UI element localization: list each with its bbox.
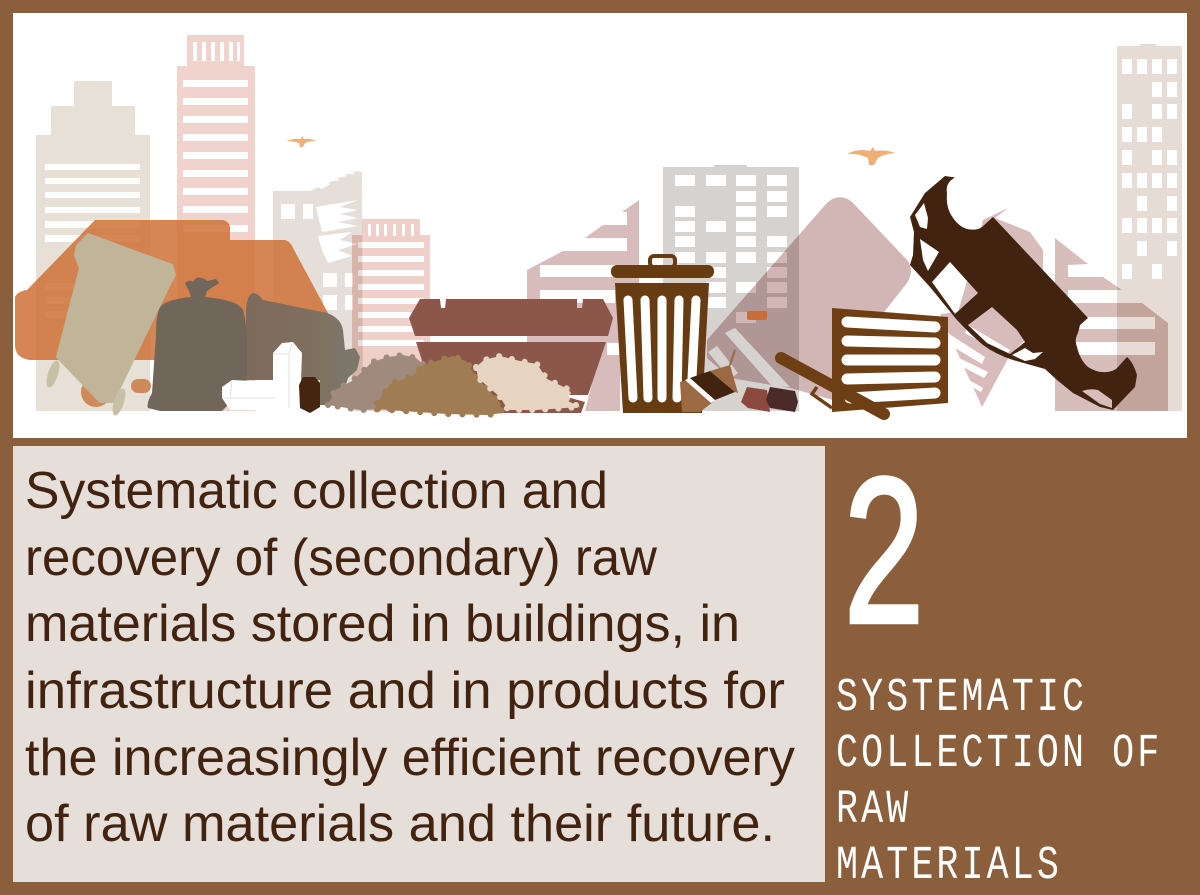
waste: paint brush xyxy=(680,350,738,412)
waste: beige wheelie bin xyxy=(44,234,175,417)
waste: milk carton xyxy=(222,342,302,410)
waste: small orange block xyxy=(747,311,767,320)
building: right windowed tower xyxy=(1117,44,1182,411)
icon: large bird xyxy=(847,147,895,165)
building: grey windowed tower xyxy=(663,165,799,411)
heading: systematic collection of raw materials: COLLECTION OF xyxy=(836,727,1162,780)
waste: wooden handle tool xyxy=(781,358,884,414)
description paragraph: Systematic collection and xyxy=(25,462,608,520)
description paragraph: recovery of (secondary) raw xyxy=(25,529,657,587)
description paragraph: materials stored in buildings, in xyxy=(25,595,740,653)
description paragraph: of raw materials and their future. xyxy=(25,795,775,853)
waste: slatted crate xyxy=(832,308,948,412)
waste: small dark bottle xyxy=(299,377,320,413)
panel: description text xyxy=(13,446,825,882)
building: beige stepped tower xyxy=(36,81,150,411)
waste: taupe rubble pile xyxy=(328,355,430,410)
waste: trash can xyxy=(611,256,714,413)
building: right mauve block xyxy=(1055,238,1168,411)
building: small pink tower xyxy=(352,219,430,411)
building: pink tower xyxy=(177,35,255,411)
description paragraph: infrastructure and in products for xyxy=(25,662,785,720)
building: mauve stepped block xyxy=(527,200,639,411)
waste: orange truck xyxy=(15,220,330,407)
waste: paint can pieces xyxy=(741,387,798,412)
heading: systematic collection of raw materials: MATERIALS xyxy=(836,839,1062,892)
icon: small bird xyxy=(286,136,316,147)
panel: illustration of city and waste xyxy=(13,13,1187,438)
waste: brown rubble pile xyxy=(377,356,502,415)
building: tilted mauve block behind car xyxy=(940,208,1043,407)
waste: second rubbish bag xyxy=(246,293,360,405)
building: beige block with palm shadow xyxy=(273,171,363,400)
heading: systematic collection of raw materials: RAW xyxy=(836,783,911,836)
building: tilted mauve block xyxy=(707,197,911,402)
description paragraph xyxy=(25,462,795,853)
waste: crashed car body xyxy=(910,176,1137,410)
number 2: 2 xyxy=(844,435,924,666)
heading: systematic collection of raw materials: SYSTEMATIC xyxy=(836,671,1087,724)
waste: dark rubbish bag xyxy=(148,278,247,411)
waste: skip container xyxy=(409,299,613,413)
heading: systematic collection of raw materials xyxy=(836,671,1162,892)
waste: cream rubble pile xyxy=(476,356,580,410)
description paragraph: the increasingly efficient recovery xyxy=(25,729,795,787)
